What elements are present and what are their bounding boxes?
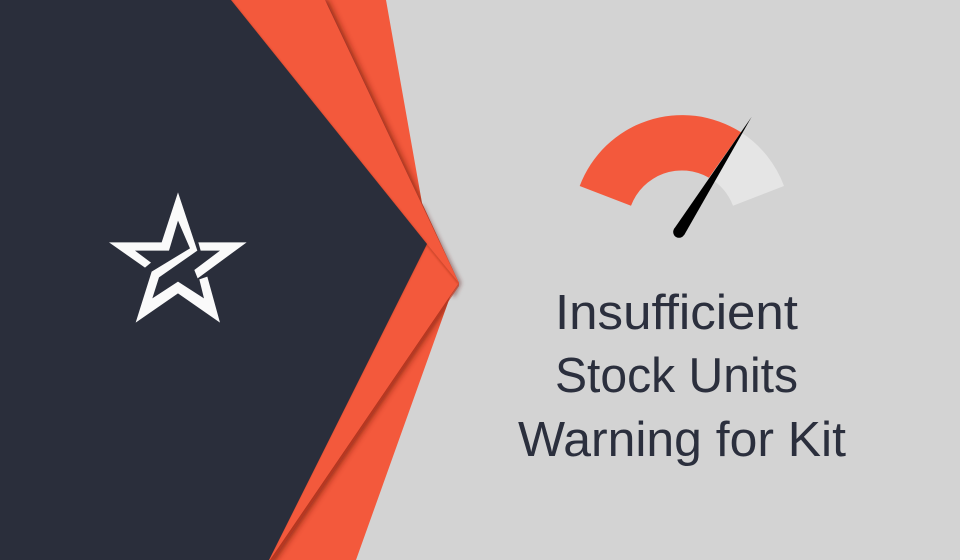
title: Insufficient [555,286,798,340]
title [518,286,846,467]
chart: speedometer gauge [580,115,784,238]
title: Stock Units [555,349,798,403]
panel: dark navy shape [0,0,427,560]
panel: folded orange ribbons [231,0,464,560]
icon: star logo [109,192,247,323]
title: Warning for Kit [518,413,846,467]
gauge filled segment [580,115,741,206]
gauge needle [673,117,752,238]
gauge empty segment [709,132,784,206]
